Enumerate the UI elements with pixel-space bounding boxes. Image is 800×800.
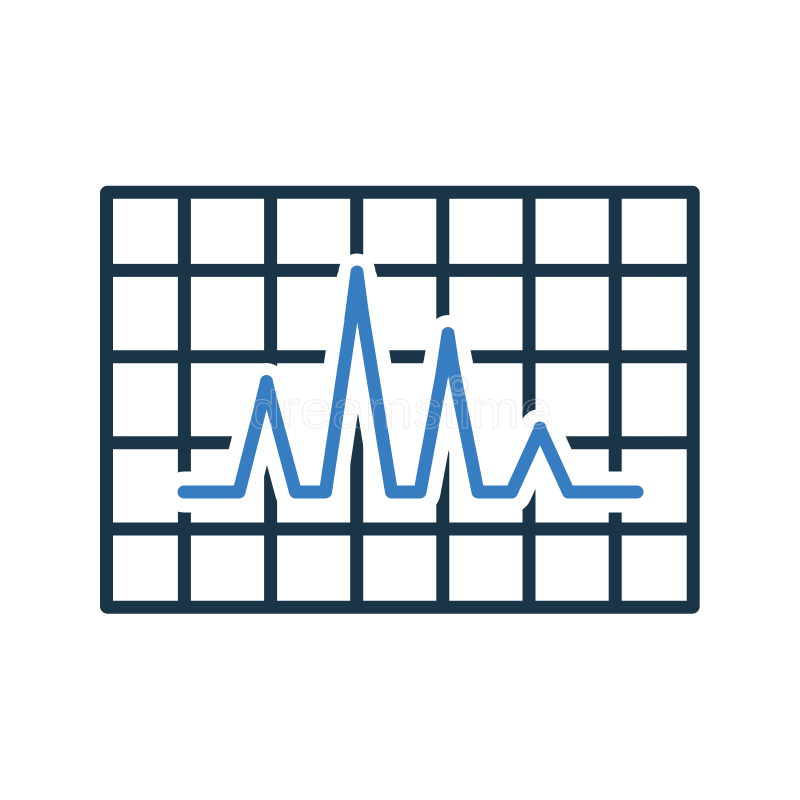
watermark: dreamstime <box>248 381 552 440</box>
grid panel <box>106 192 693 607</box>
pulse line <box>184 272 637 492</box>
watermark: © <box>447 370 469 403</box>
white halo around the line <box>184 272 637 492</box>
